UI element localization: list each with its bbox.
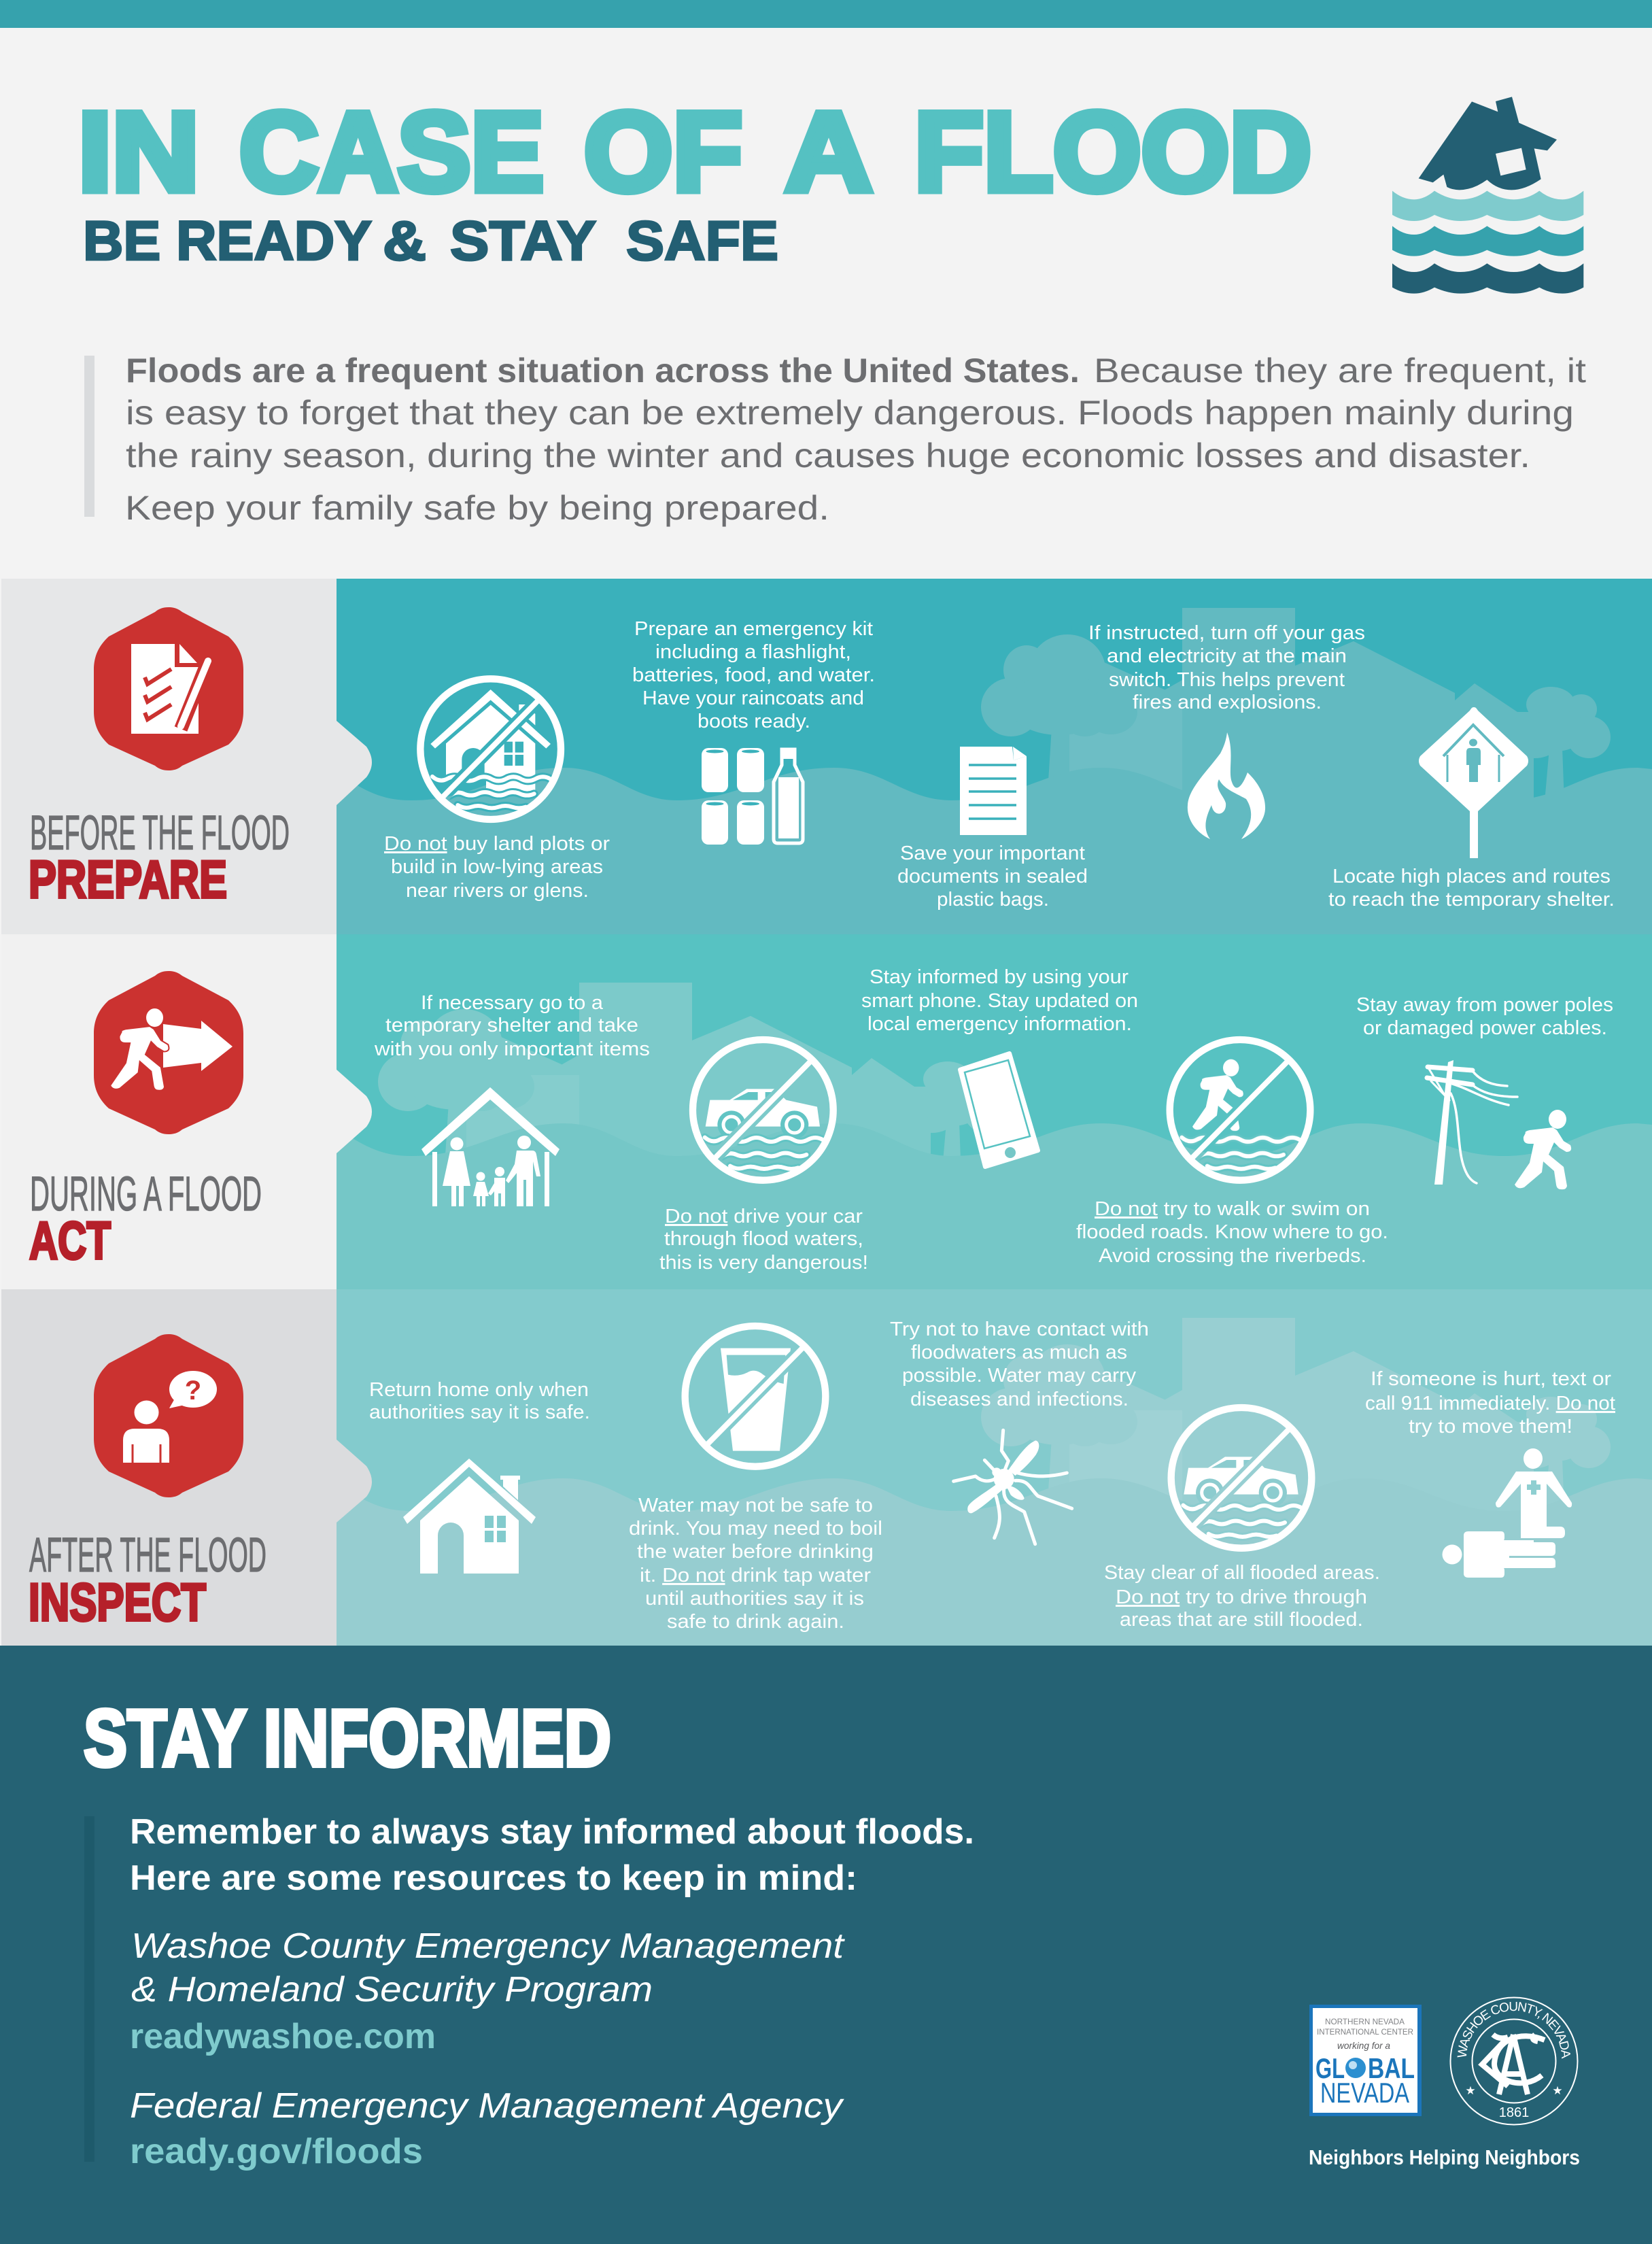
text: stay informed phone <box>861 966 1138 1035</box>
text: emergency kit: batteries, food, and water. <box>632 664 875 686</box>
icon: person walking away <box>1515 1110 1571 1189</box>
text: save documents: plastic bags. <box>937 889 1049 911</box>
logo: global nevada: GL <box>1315 2052 1345 2084</box>
heading: before the flood: BEFORE THE FLOOD <box>30 806 290 860</box>
heading: before the flood <box>29 806 290 909</box>
text: locate shelters: Locate high places and routes <box>1332 866 1611 887</box>
icon: no driving in flood <box>693 1040 833 1180</box>
logo: global nevada: BAL <box>1368 2052 1415 2084</box>
text: return home: authorities say it is safe. <box>369 1401 590 1423</box>
logo: global nevada: INTERNATIONAL CENTER <box>1317 2027 1413 2037</box>
icon: medic and patient <box>1443 1448 1572 1578</box>
text: turn off gas: If instructed, turn off your gas <box>1088 622 1365 644</box>
text: stay informed phone: Stay informed by using your <box>870 966 1129 988</box>
text: power poles <box>1356 994 1613 1039</box>
text: save documents <box>897 843 1088 911</box>
icon: document <box>960 747 1027 835</box>
subtitle: BE READY <box>83 210 372 272</box>
text: power poles: Stay away from power poles <box>1356 994 1613 1016</box>
heading: during a flood: ACT <box>29 1210 111 1270</box>
resources text: Remember to always stay informed about floods. <box>130 1812 974 1852</box>
text: water safety: the water before drinking <box>637 1541 874 1563</box>
text: go to shelter: temporary shelter and take <box>385 1015 638 1036</box>
top band <box>0 0 1652 28</box>
subtitle <box>83 210 778 272</box>
icon: family shelter <box>421 1087 560 1206</box>
text: do not walk: Do not try to walk or swim on <box>1095 1198 1370 1220</box>
text: power poles: or damaged power cables. <box>1363 1017 1607 1039</box>
text: call 911: call 911 immediately. Do not <box>1365 1393 1615 1414</box>
title: FLOOD <box>914 89 1311 214</box>
text: floodwater contact <box>890 1319 1149 1410</box>
intro text block <box>84 352 1586 527</box>
text: emergency kit: Prepare an emergency kit <box>634 618 873 640</box>
title: IN <box>78 89 199 214</box>
title: OF <box>584 89 742 214</box>
intro text block: is easy to forget that they can be extremely dangerous. Floods happen mainly during <box>126 394 1574 432</box>
logo: washoe county seal: ★ <box>1465 2084 1476 2097</box>
text: stay informed phone: local emergency information. <box>867 1013 1132 1035</box>
text: locate shelters: to reach the temporary shelter. <box>1328 889 1615 911</box>
intro text block: Floods are a frequent situation across the United States. <box>126 352 1080 390</box>
icon: no walking in flood <box>1170 1040 1310 1180</box>
logo: washoe county seal: ★ <box>1552 2084 1563 2097</box>
text: return home: Return home only when <box>369 1379 589 1401</box>
text: do not buy land: build in low-lying areas <box>391 856 603 878</box>
text: do not drive: through flood waters, <box>664 1228 863 1250</box>
heading: after the flood: AFTER THE FLOOD <box>29 1529 266 1582</box>
text: stay clear: areas that are still flooded. <box>1120 1609 1363 1631</box>
resources text: Washoe County Emergency Management <box>131 1926 846 1966</box>
icon: no drinking water <box>685 1326 825 1467</box>
text: water safety: safe to drink again. <box>667 1611 844 1633</box>
icon: mosquito <box>954 1430 1072 1544</box>
logo: global nevada: working for a <box>1337 2040 1390 2051</box>
panel: before the flood <box>1 579 1652 935</box>
text: go to shelter <box>374 992 650 1060</box>
resources text: readywashoe.com <box>130 2017 436 2056</box>
heading: before the flood: PREPARE <box>29 849 227 909</box>
text: go to shelter: If necessary go to a <box>421 992 604 1014</box>
icon: person with arrow <box>94 971 243 1134</box>
logo: washoe county seal: WASHOE COUNTY, NEVADA <box>1458 2002 1570 2059</box>
subtitle: STAY <box>450 210 596 272</box>
text: do not walk: flooded roads. Know where to go. <box>1076 1221 1388 1243</box>
icon: no driving in flooded area <box>1171 1408 1311 1548</box>
heading: after the flood <box>29 1529 266 1632</box>
heading: during a flood <box>29 1168 262 1270</box>
text: stay clear: Stay clear of all flooded areas. <box>1104 1562 1380 1584</box>
panel: stay informed <box>0 1646 1652 2244</box>
text: locate shelters <box>1328 866 1615 911</box>
text: do not walk: Avoid crossing the riverbeds. <box>1099 1245 1366 1267</box>
text: floodwater contact: Try not to have contact with <box>890 1319 1149 1340</box>
text: save documents: documents in sealed <box>897 866 1088 887</box>
text: call 911: If someone is hurt, text or <box>1371 1368 1611 1390</box>
text: do not drive <box>659 1206 868 1274</box>
text: water safety <box>629 1495 882 1633</box>
text: return home <box>369 1379 590 1423</box>
heading: during a flood: DURING A FLOOD <box>30 1168 262 1221</box>
text: do not walk <box>1076 1198 1388 1267</box>
resources text <box>84 1812 974 2171</box>
heading: after the flood: INSPECT <box>29 1572 206 1632</box>
resources text: & Homeland Security Program <box>131 1970 653 2009</box>
text: water safety: until authorities say it is <box>645 1588 864 1610</box>
intro text block: Keep your family safe by being prepared. <box>125 489 829 527</box>
logo: washoe county seal <box>1449 1996 1579 2126</box>
text: call 911: try to move them! <box>1409 1416 1572 1438</box>
text: water safety: drink. You may need to boil <box>629 1518 882 1540</box>
subtitle: & <box>383 210 426 272</box>
text: save documents: Save your important <box>900 843 1085 864</box>
text: water safety: it. Do not drink tap water <box>640 1565 871 1586</box>
title <box>78 89 1311 214</box>
icon: no building in flood zones <box>420 679 561 819</box>
text: floodwater contact: diseases and infections. <box>910 1389 1129 1410</box>
panel: after the flood <box>1 1289 1652 1646</box>
intro text block: the rainy season, during the winter and causes huge economic losses and disaster. <box>126 437 1530 475</box>
icon: damaged power pole <box>1427 1060 1517 1185</box>
intro text block: Because they are frequent, it <box>1094 352 1586 390</box>
text: do not drive: this is very dangerous! <box>659 1252 868 1274</box>
icon: person with question <box>94 1334 243 1497</box>
heading: stay informed: STAY INFORMED <box>84 1693 611 1784</box>
icon: flame <box>1188 732 1265 839</box>
icon: smart phone <box>960 1053 1038 1167</box>
resources text: ready.gov/floods <box>130 2132 423 2171</box>
logo: global nevada: NEVADA <box>1320 2077 1409 2109</box>
panel: during a flood <box>1 934 1652 1291</box>
resources text: Here are some resources to keep in mind: <box>130 1858 857 1898</box>
text: floodwater contact: possible. Water may carry <box>902 1365 1137 1387</box>
icon: person with question: ? <box>185 1376 201 1406</box>
text: turn off gas: and electricity at the main <box>1107 645 1347 667</box>
text: emergency kit <box>632 618 875 732</box>
subtitle: SAFE <box>626 210 778 272</box>
text: do not drive: Do not drive your car <box>665 1206 863 1227</box>
text: stay clear: Do not try to drive through <box>1116 1586 1367 1608</box>
resources text: Federal Emergency Management Agency <box>130 2086 844 2126</box>
tagline: Neighbors Helping Neighbors <box>1309 2145 1580 2169</box>
icon: shelter sign <box>1419 707 1528 858</box>
text: stay clear <box>1104 1562 1380 1631</box>
icon: flooded house <box>1392 97 1583 294</box>
text: emergency kit: boots ready. <box>698 711 810 732</box>
title: CASE <box>239 89 544 214</box>
text: floodwater contact: floodwaters as much as <box>911 1342 1127 1363</box>
text: emergency kit: Have your raincoats and <box>642 687 864 709</box>
icon: batteries and bottle <box>702 748 803 845</box>
text: stay informed phone: smart phone. Stay updated on <box>861 990 1138 1012</box>
text: water safety: Water may not be safe to <box>638 1495 873 1516</box>
text: do not buy land <box>384 833 610 902</box>
text: do not buy land: near rivers or glens. <box>406 880 589 902</box>
text: call 911 <box>1365 1368 1615 1438</box>
logo: global nevada: NORTHERN NEVADA <box>1325 2017 1405 2026</box>
text: go to shelter: with you only important items <box>374 1038 650 1060</box>
text: turn off gas <box>1088 622 1365 713</box>
text: turn off gas: fires and explosions. <box>1133 692 1322 713</box>
icon: checklist <box>94 607 243 770</box>
title: A <box>785 89 872 214</box>
text: do not buy land: Do not buy land plots or <box>384 833 610 855</box>
logo: washoe county seal: 1861 <box>1499 2105 1529 2120</box>
logo: global nevada <box>1309 2005 1422 2116</box>
text: emergency kit: including a flashlight, <box>655 641 851 663</box>
icon: house <box>403 1459 536 1574</box>
text: turn off gas: switch. This helps prevent <box>1109 669 1345 691</box>
